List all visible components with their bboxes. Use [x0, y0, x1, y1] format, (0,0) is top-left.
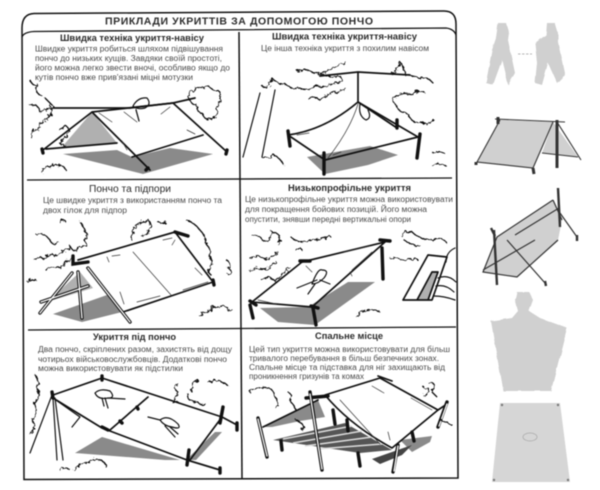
panel: poncho and supports [28, 184, 232, 322]
heading: panel 1: Швидка техніка укриття-навісу [60, 33, 205, 44]
text block: panel 4: для покращення бойових позицій. Його можна [245, 205, 428, 214]
text block: panel 2: Це інша техніка укриття з похилим навісом [261, 44, 429, 53]
text block: panel 5: Два пончо, скріплених разом, захистять від дощу [38, 345, 232, 354]
text block: panel 6: Цей тип укриття можна використовувати для більш [249, 345, 450, 354]
illustration: raised bed under poncho [250, 376, 452, 472]
text block: panel 5 [38, 345, 232, 373]
heading: panel 3: Пончо та підпори [89, 184, 171, 195]
heading: panel 4: Низькопрофільне укриття [288, 183, 411, 194]
frame: main rounded border [22, 11, 458, 480]
panel: shelter under poncho [30, 332, 237, 473]
text block: panel 4 [245, 195, 453, 224]
text block: panel 3: двох гілок для підпор [43, 206, 128, 215]
text block: panel 1: пончо до низьких кущів. Завдяки своїй простоті, [35, 54, 222, 63]
text block: panel 6: проникнення гризунів та комах [249, 372, 364, 381]
text block: panel 3: Це швидке укриття з використанням пончо та [43, 196, 223, 205]
text block: panel 1: кутів пончо вже прив'язані міцні мотузки [35, 73, 193, 82]
icon: poncho being put on [486, 23, 565, 85]
panel: low profile shelter [245, 183, 456, 325]
text block: panel 6: Спальне місце та підставка для ніг захищають від [249, 363, 445, 372]
heading: panel 2: Швидка техніка укриття-навісу [272, 32, 418, 42]
heading: panel 5: Укриття під пончо [93, 332, 176, 343]
icon: poncho laid flat [492, 403, 570, 482]
text block: panel 5: чотирьох військовослужбовців. Додаткові пончо [38, 355, 228, 364]
text block: panel 1: його можна легко звести вночі, особливо якщо до [35, 64, 231, 72]
panel: quick lean-to shelter 2 [243, 32, 446, 174]
illustration: low profile poncho [250, 232, 446, 325]
text block: panel 4: Це низькопрофільне укриття можна використовувати [245, 195, 453, 204]
illustration: poncho on forked branches [28, 219, 232, 322]
text block: panel 6 [249, 345, 450, 381]
illustration: two joined ponchos [30, 375, 237, 473]
icon: poncho worn, front view [491, 292, 567, 391]
text block: panel 4: опустити, знявши передні вертикальні опори [245, 215, 411, 224]
illustration: fighting position trench [403, 248, 456, 300]
heading: panel 6: Спальне місце [315, 331, 383, 342]
text block: panel 6: тривалого перебування в більш безпечних зонах. [249, 354, 439, 363]
title: ПРИКЛАДИ УКРИТТІВ ЗА ДОПОМОГОЮ ПОНЧО [105, 16, 373, 28]
text block: panel 5: можна використовувати як підстилки [38, 364, 183, 373]
text block: panel 1: Швидке укриття робиться шляхом підвішування [35, 44, 223, 54]
panel: quick lean-to shelter 1 [30, 33, 231, 174]
illustration: poncho hung between bushes [30, 80, 227, 174]
text block: panel 1 [35, 44, 231, 82]
icon: lean-to with guy lines [483, 188, 577, 286]
text block: panel 3 [43, 196, 223, 215]
panel: sleeping place [249, 331, 452, 472]
illustration: sloped shelter under tree [243, 62, 446, 174]
icon: A-frame poncho tent [476, 117, 581, 174]
